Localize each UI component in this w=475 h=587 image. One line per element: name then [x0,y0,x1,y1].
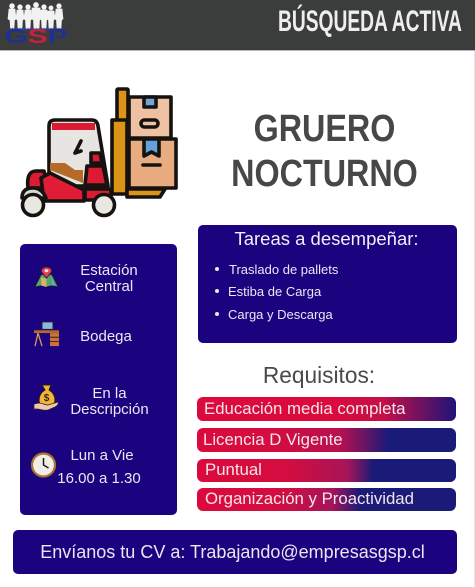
panel: job details [20,244,177,515]
seat [50,163,83,183]
location text: Estación [80,262,138,279]
requirement: education: Educación media completa [204,399,406,418]
mast [117,89,128,121]
location text [80,262,138,295]
icon: money bag [34,384,59,411]
salary text: Descripción [70,400,149,418]
contact text: Envíanos tu CV a: Trabajando@empresasgsp.cl [40,542,425,562]
wheels [22,194,44,216]
column [91,153,102,163]
logo silhouettes [8,2,64,30]
job title: NOCTURNO [231,153,418,195]
area text: Bodega [80,328,132,345]
icon: desk [34,322,59,346]
logo: GSP [4,2,68,48]
requirement: education [197,397,456,421]
requirement: organization [197,488,456,511]
rear fender guard [22,188,46,198]
salary text [70,385,149,418]
job title [231,108,418,195]
schedule text: 16.00 a 1.30 [57,470,141,487]
upper box [129,97,171,138]
header bar [0,0,475,51]
fork [127,189,165,197]
task list: Traslado de pallets [229,262,338,277]
requirements heading: Requisitos: [263,362,375,388]
task list: Estiba de Carga [228,284,321,299]
icon: money bag: $ [44,393,50,404]
icon: forklift with boxes [20,87,178,218]
cab [49,120,108,186]
icon: map pin [34,266,59,288]
task list: Carga y Descarga [228,307,333,322]
requirement: organization: Organización y Proactividad [205,489,414,508]
right edge strip [474,51,475,587]
requirement: punctual [197,459,456,482]
job title: GRUERO [254,108,395,150]
schedule text: Lun a Vie [70,447,134,464]
requirement: license: Licencia D Vigente [203,430,343,449]
rear fender [28,171,48,188]
requirement: license [197,428,456,452]
task list [215,262,338,322]
lower box [129,139,176,188]
panel: contact footer [13,530,457,574]
location text: Central [85,278,133,295]
requirement: punctual: Puntual [205,460,262,479]
panel: tasks [198,225,457,343]
schedule text [57,447,141,487]
icon: clock [30,452,56,478]
salary text: En la [92,385,127,402]
tasks heading: Tareas a desempeñar: [234,228,419,249]
steering [75,141,81,153]
body [41,173,84,201]
logo letters: GSP [4,26,68,48]
header title: BÚSQUEDA ACTIVA [278,5,462,38]
